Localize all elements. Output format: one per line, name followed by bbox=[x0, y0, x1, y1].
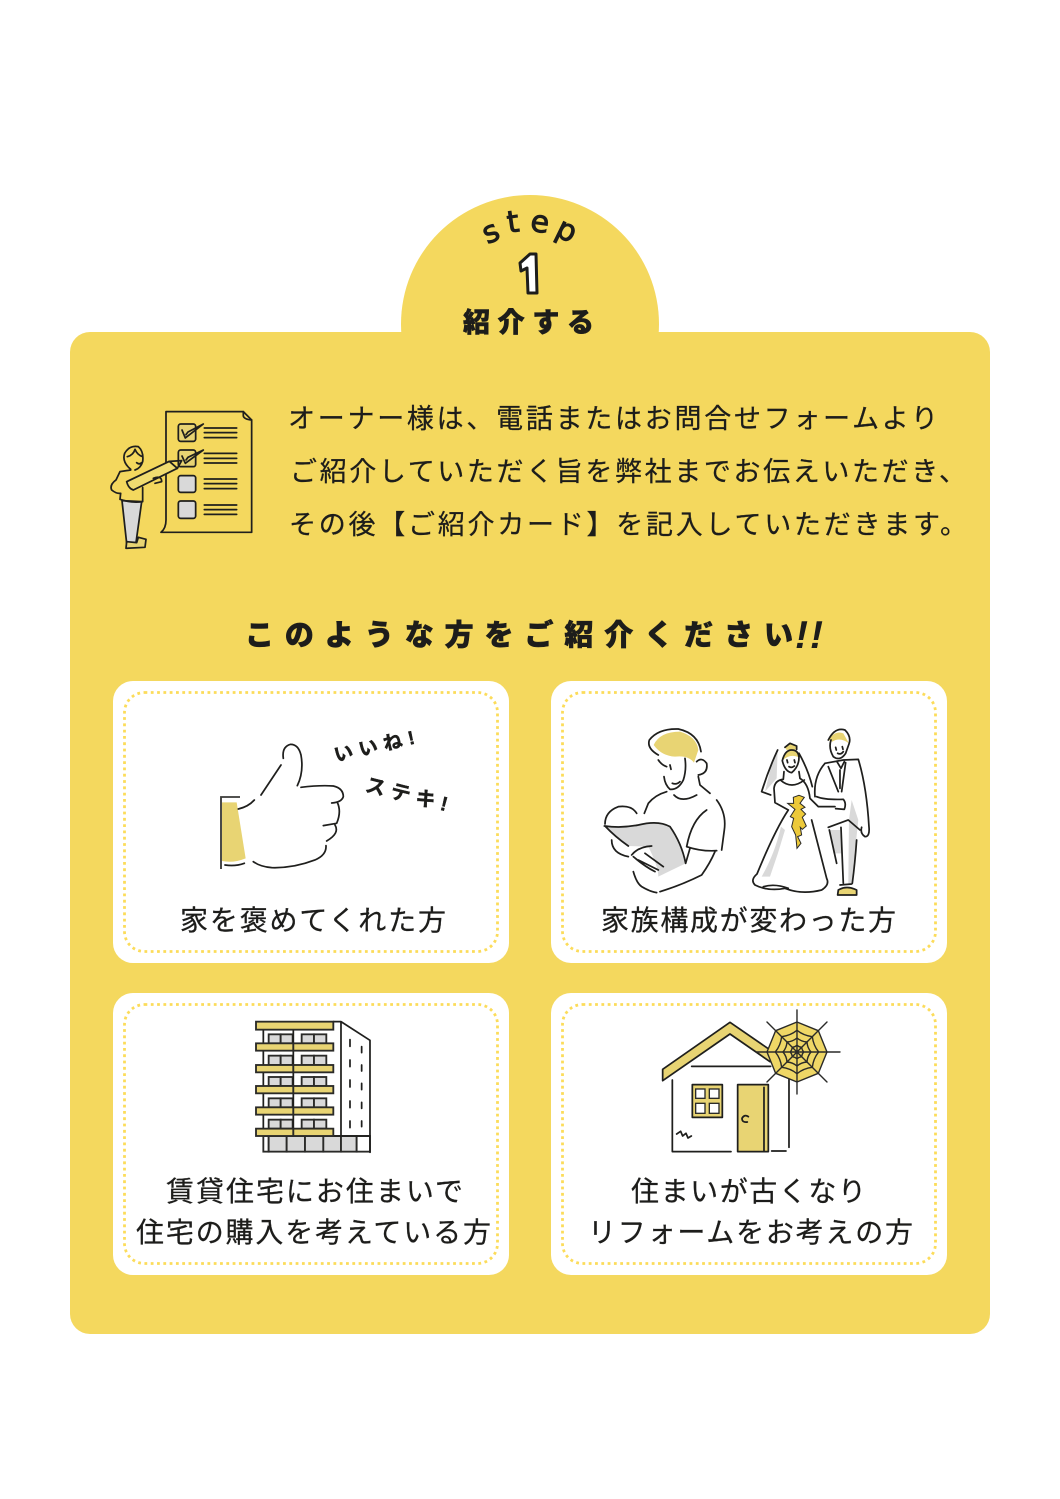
panel: yellow background bbox=[70, 195, 990, 1334]
step badge heading: p bbox=[550, 211, 583, 251]
step badge heading: e bbox=[528, 204, 552, 241]
card: praised the house bbox=[113, 681, 509, 963]
intro text: オーナー様は、電話またはお問合せフォームより bbox=[288, 404, 938, 434]
step badge heading: s bbox=[477, 213, 505, 252]
card: old house: リフォームをお考えの方 bbox=[588, 1217, 913, 1248]
intro text bbox=[288, 404, 967, 540]
card: old house bbox=[551, 993, 947, 1275]
label: 家族構成が変わった方 bbox=[601, 905, 896, 936]
step badge heading bbox=[463, 204, 594, 338]
intro text: その後【ご紹介カード】を記入していただきます。 bbox=[289, 510, 967, 540]
step badge heading: 紹介する bbox=[463, 308, 594, 338]
section heading: このような方をご紹介ください bbox=[245, 618, 793, 652]
icon: apartment building bbox=[256, 1022, 370, 1152]
label: 家を褒めてくれた方 bbox=[180, 905, 446, 936]
label: 住まいが古くなり bbox=[631, 1176, 866, 1207]
step badge heading: t bbox=[505, 204, 522, 241]
section heading: !! bbox=[795, 614, 823, 657]
card: renters bbox=[113, 993, 509, 1275]
card: praised the house: ステキ! bbox=[363, 774, 450, 816]
card: renters: 住宅の購入を考えている方 bbox=[136, 1217, 491, 1248]
card: family change bbox=[551, 681, 947, 963]
icon: house with cobweb bbox=[663, 1010, 840, 1152]
label: 賃貸住宅にお住まいで bbox=[166, 1176, 463, 1207]
icon: person with checklist bbox=[111, 412, 252, 548]
icon: thumbs up bbox=[221, 744, 343, 869]
icon: father and baby, bride and groom bbox=[604, 729, 869, 895]
intro text: ご紹介していただく旨を弊社までお伝えいただき、 bbox=[290, 457, 966, 487]
card: praised the house: いいね! bbox=[332, 727, 417, 767]
